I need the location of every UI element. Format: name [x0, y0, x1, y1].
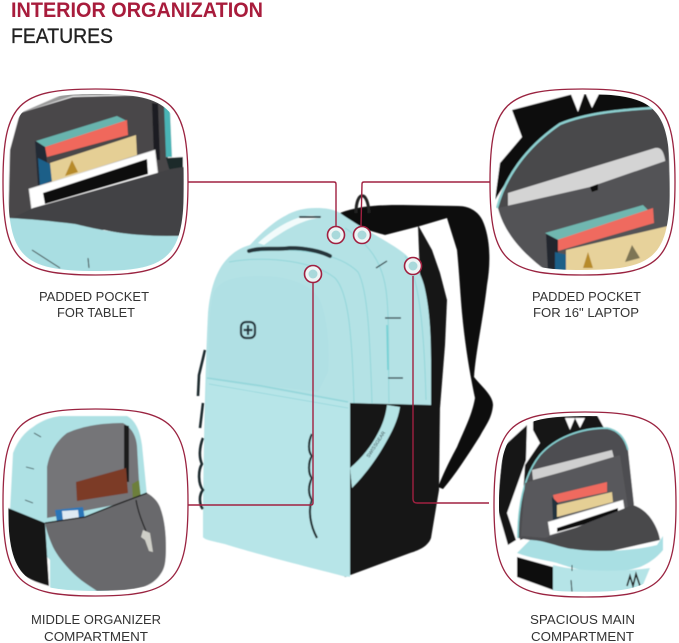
logo badge [241, 322, 255, 338]
shoulder strap [340, 205, 493, 489]
lower black body [340, 402, 440, 577]
side strip with brand: SWISSGEAR [366, 430, 387, 459]
side cords right [309, 434, 317, 538]
label: padded pocket for tablet: PADDED POCKET [39, 289, 149, 304]
panel: middle organizer compartment [0, 405, 195, 600]
side straps ticks [376, 261, 403, 378]
marker: tablet pocket [328, 226, 344, 244]
light blue body [203, 208, 431, 577]
label: padded pocket for laptop: PADDED POCKET [532, 289, 641, 304]
backpack illustration [198, 196, 493, 577]
title [11, 0, 263, 48]
front pocket [209, 276, 329, 392]
panel: padded pocket for laptop [485, 85, 679, 280]
panel: padded pocket for tablet [0, 85, 195, 280]
marker: organizer [304, 266, 322, 282]
top zipper pull [249, 248, 330, 256]
handle binding [300, 216, 320, 218]
label: middle organizer: MIDDLE ORGANIZER [31, 612, 161, 627]
seams [207, 228, 426, 408]
top carry loop [356, 196, 369, 213]
marker: main compartment [404, 258, 422, 274]
top handle gap [258, 216, 322, 245]
marker: laptop pocket [354, 226, 370, 244]
title: FEATURES [11, 25, 113, 48]
side strip with brand [350, 405, 400, 488]
side cords left [198, 350, 205, 509]
panel: spacious main compartment [490, 405, 679, 600]
label: for tablet: FOR TABLET [57, 305, 135, 320]
lower front panel [203, 379, 350, 577]
back padding [418, 225, 447, 408]
callout connector lines [188, 182, 490, 505]
label: spacious main: SPACIOUS MAIN [530, 612, 635, 627]
label: for 16 inch laptop: FOR 16" LAPTOP [533, 305, 639, 320]
